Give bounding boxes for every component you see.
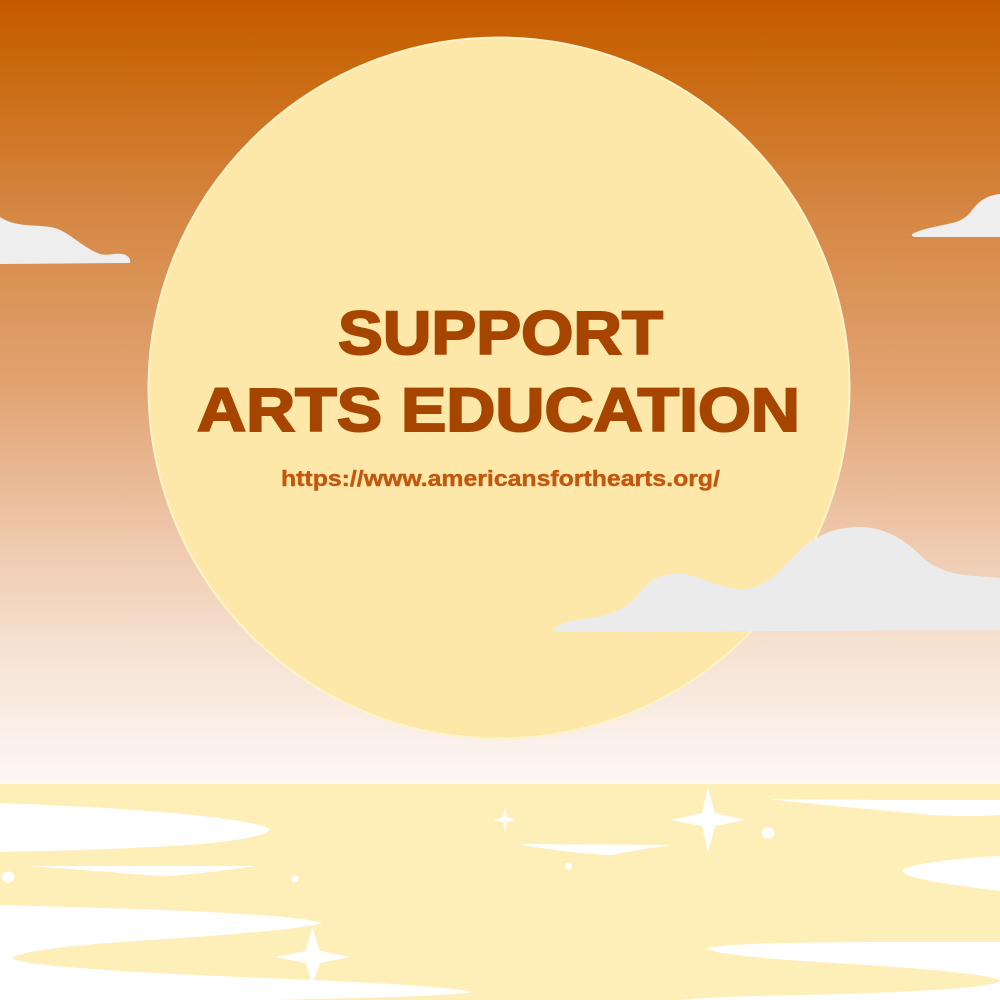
- heading line 2: ARTS EDUCATION: [197, 376, 800, 444]
- water base: [0, 784, 1000, 1000]
- cloud: lower right: [554, 527, 1000, 632]
- water ripple: center: [518, 844, 674, 855]
- sparkle: lower left: [275, 927, 350, 985]
- heading: [197, 299, 800, 444]
- water: [0, 784, 1000, 1000]
- water ripple: lower right: [680, 942, 1000, 1000]
- cloud: right: [912, 194, 1000, 237]
- water ripple: upper right: [768, 799, 1000, 816]
- water ripple: mid right: [902, 856, 1000, 891]
- dots: [2, 828, 774, 882]
- water ripple: upper left: [0, 803, 269, 852]
- sky background: [0, 0, 1000, 785]
- water ripple: thin left: [30, 866, 256, 876]
- heading line 1: SUPPORT: [338, 299, 663, 367]
- water ripple: lower left band: [0, 905, 473, 1000]
- sparkle: large center right: [671, 787, 745, 853]
- website url: https://www.americansforthearts.org/: [281, 466, 720, 491]
- sun circle: [148, 38, 850, 738]
- sparkle: small center: [493, 808, 517, 832]
- cloud: left: [0, 217, 130, 264]
